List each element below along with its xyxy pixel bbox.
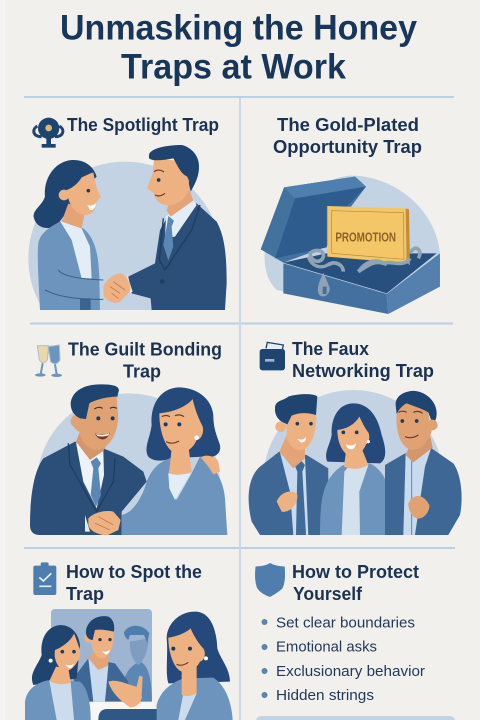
illustration: women reviewing a photo of colleagues	[25, 609, 233, 720]
heading	[68, 340, 222, 382]
heading: The Gold-Plated	[277, 115, 419, 135]
list: protective steps: Set clear boundaries	[276, 614, 415, 632]
icon: shield	[255, 563, 285, 597]
title: Unmasking the Honey	[60, 8, 418, 48]
icon: briefcase	[260, 342, 285, 370]
list: protective steps: Exclusionary behavior	[276, 663, 425, 680]
illustration: three smiling colleagues	[248, 390, 462, 535]
list: protective steps: Hidden strings	[276, 687, 374, 704]
icon: wine glasses	[35, 345, 62, 377]
panel: The Spotlight Trap	[28, 118, 227, 310]
panel: How to Protect Yourself	[255, 562, 455, 720]
label: PROMOTION: PROMOTION	[335, 229, 396, 244]
heading	[273, 115, 422, 157]
icon: clipboard with check	[33, 562, 56, 595]
illustration: handshake between woman and man	[28, 145, 227, 310]
list: protective steps: Emotional asks	[276, 638, 377, 656]
icon: trophy	[34, 118, 63, 148]
heading: Trap	[66, 584, 104, 604]
panel: The Guilt Bonding Trap	[30, 342, 228, 535]
heading: Networking Trap	[292, 361, 434, 381]
heading: Trap	[123, 362, 161, 382]
heading: Opportunity Trap	[273, 137, 422, 157]
heading	[66, 562, 202, 604]
heading: How to Protect	[292, 562, 419, 582]
heading: Yourself	[293, 584, 363, 604]
panel: The Gold-Plated Opportunity Trap	[261, 115, 440, 314]
heading: The Guilt Bonding	[68, 340, 222, 360]
heading: How to Spot the	[66, 562, 202, 582]
heading	[292, 562, 419, 604]
panel: The Faux Networking Trap	[248, 342, 462, 535]
heading	[292, 339, 434, 381]
panel: How to Spot the Trap	[25, 562, 233, 720]
list: protective steps	[262, 614, 425, 704]
heading: The Faux	[292, 339, 369, 359]
heading: The Spotlight Trap	[67, 115, 219, 135]
callout box cropped at bottom edge	[256, 716, 455, 720]
title	[60, 8, 418, 86]
title: Traps at Work	[121, 48, 347, 86]
illustration: man and woman, hand on shoulder	[30, 384, 228, 535]
illustration: open box with chained promotion ticket	[261, 176, 440, 314]
